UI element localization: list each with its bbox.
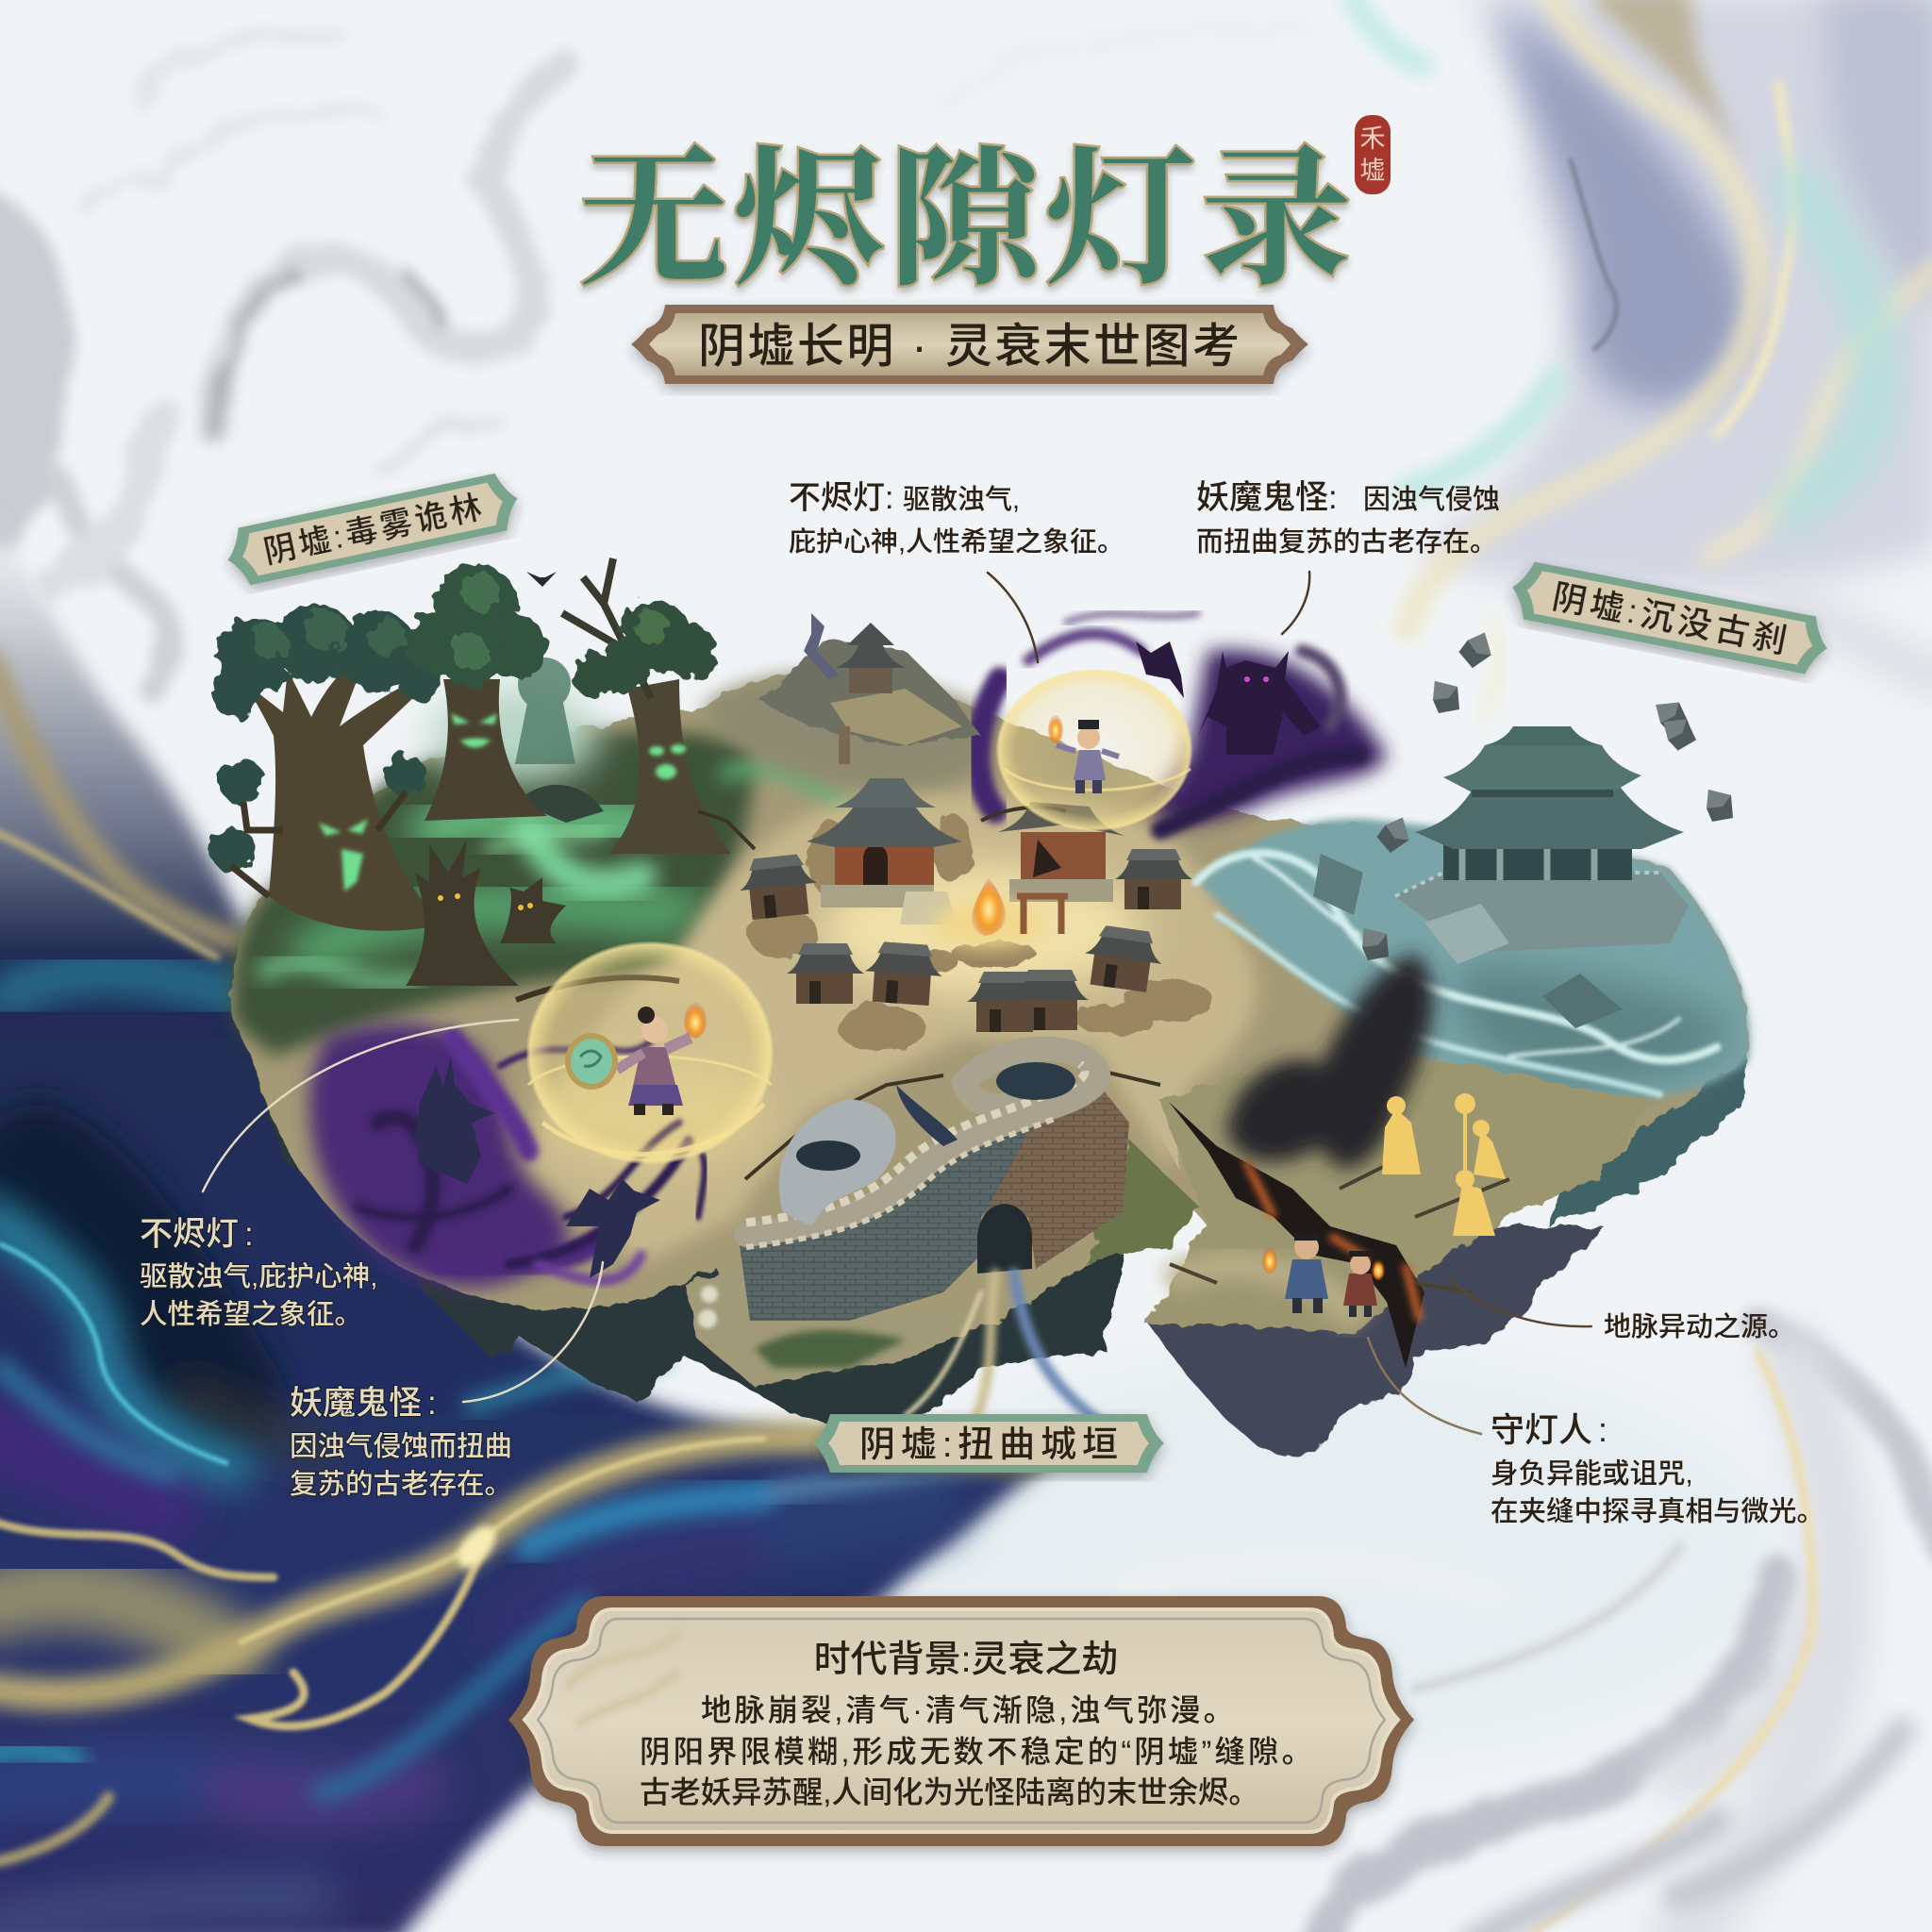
shadow demons xyxy=(415,1057,660,1278)
annotation: lamp lower left: 驱散浊气,庇护心神, xyxy=(140,1261,377,1292)
annotation: lamp keeper: 守灯人: xyxy=(1491,1410,1607,1449)
tan dusk ribbons left xyxy=(0,660,245,943)
lavender mass top right xyxy=(1415,0,1932,594)
campfire xyxy=(932,877,1068,947)
panel: era background xyxy=(508,1596,1414,1846)
left guardian bubble xyxy=(526,941,774,1164)
region: sunken shrine water xyxy=(1196,819,1749,1098)
floating island map xyxy=(209,558,1749,1458)
panel heading: 时代背景:灵衰之劫 xyxy=(814,1640,1118,1680)
sunken shrine xyxy=(1313,726,1689,1028)
purple miasma top xyxy=(978,613,1387,830)
annotation: demons lower left xyxy=(290,1385,512,1500)
panel body xyxy=(640,1693,1312,1809)
stump creatures xyxy=(406,840,566,986)
red seal: 禾 xyxy=(1360,125,1385,153)
annotation: lamp top: 驱散浊气, xyxy=(903,484,1020,515)
rock outcrop with pagoda xyxy=(762,613,981,764)
jade mirror xyxy=(565,1033,618,1090)
annotation: lamp lower left: 不烬灯: xyxy=(140,1216,254,1253)
annotation: lamp lower left xyxy=(140,1216,377,1330)
label: sunken shrine xyxy=(1507,558,1833,677)
annotation: source: 地脉异动之源。 xyxy=(1604,1311,1795,1342)
region: sand ground xyxy=(528,791,1256,1264)
annotation: demons lower left: 因浊气侵蚀而扭曲 xyxy=(290,1431,512,1462)
annotation: demons top: 因浊气侵蚀 xyxy=(1363,484,1500,515)
annotation: demons top: 而扭曲复苏的古老存在。 xyxy=(1196,526,1497,558)
annotation: demons lower left: 复苏的古老存在。 xyxy=(290,1469,512,1500)
annotation: lamp top: 庇护心神,人性希望之象征。 xyxy=(789,526,1124,558)
annotation: demons top xyxy=(1196,479,1500,558)
leader lines xyxy=(203,572,1591,1434)
red seal: 墟 xyxy=(1360,157,1385,185)
annotation: lamp keeper xyxy=(1491,1410,1824,1527)
dark storm lower left xyxy=(0,491,1047,1932)
distant tree xyxy=(515,658,575,764)
flying debris xyxy=(1362,631,1733,960)
second temple xyxy=(998,802,1124,902)
label: twisted wall xyxy=(813,1414,1164,1473)
annotation: lamp top: 不烬灯: xyxy=(789,480,893,516)
wall body xyxy=(739,1099,1099,1321)
region: scorched plain xyxy=(1145,1063,1654,1335)
region: poison forest ground xyxy=(232,689,849,1057)
annotation: lamp lower left: 人性希望之象征。 xyxy=(140,1299,362,1330)
annotation: demons top: 妖魔鬼怪: xyxy=(1196,479,1338,516)
grey sweeps lower right xyxy=(1316,1574,1775,1932)
teal aurora xyxy=(0,1217,236,1467)
mist trees: poison forest xyxy=(209,558,731,986)
purple miasma left xyxy=(309,1024,705,1288)
fall of light beneath arch xyxy=(906,1274,1104,1443)
tree three with face xyxy=(562,558,731,854)
fractures xyxy=(516,808,1160,1179)
moss base xyxy=(684,1269,981,1387)
label: sunken shrine: 阴墟:沉没古刹 xyxy=(1549,576,1790,660)
panel body: 古老妖异苏醒,人间化为光怪陆离的末世余烬。 xyxy=(640,1775,1259,1809)
black smoke xyxy=(1226,953,1433,1168)
wall walkway xyxy=(746,1049,1098,1235)
pale fog behind trees xyxy=(429,689,599,783)
burning village xyxy=(737,778,1213,1053)
chasm fissure xyxy=(1169,1102,1509,1368)
annotation: demons lower left: 妖魔鬼怪: xyxy=(290,1385,437,1422)
subtitle banner: 阴墟长明 · 灵衰末世图考 xyxy=(698,320,1240,373)
region: grey plateau xyxy=(703,674,1000,790)
island surface base xyxy=(231,671,1749,1358)
panel body: 阴阳界限模糊,形成无数不稳定的“阴墟”缝隙。 xyxy=(640,1735,1312,1769)
annotation: lamp top xyxy=(789,480,1124,558)
tree two with face xyxy=(407,564,547,821)
rubble heaps xyxy=(749,815,1213,1053)
cliffs under the island xyxy=(247,1047,1748,1458)
label: poison forest xyxy=(222,470,524,589)
golden spirits xyxy=(1382,1093,1506,1236)
twisted great wall xyxy=(684,1049,1200,1387)
grey ink swirls upper left xyxy=(0,28,1302,689)
demons above xyxy=(1136,641,1321,755)
lamp bearer xyxy=(617,1003,707,1115)
temple guardian bubble xyxy=(996,669,1192,831)
label: twisted wall: 阴墟:扭曲城垣 xyxy=(859,1425,1118,1465)
main temple xyxy=(807,778,962,924)
gold aurora xyxy=(0,1592,226,1651)
twisted stone ribbon xyxy=(779,1099,896,1226)
annotation: lamp keeper: 在夹缝中探寻真相与微光。 xyxy=(1491,1496,1824,1527)
title: 无烬隙灯录 xyxy=(577,137,1357,305)
huts xyxy=(737,853,820,921)
lantern keepers xyxy=(1262,1233,1385,1317)
crow xyxy=(526,572,557,587)
red seal xyxy=(1355,115,1391,194)
tree one with face xyxy=(209,604,453,931)
cool center haze xyxy=(849,1349,1792,1764)
annotation: lamp keeper: 身负异能或诅咒, xyxy=(1491,1458,1693,1490)
subtitle banner xyxy=(631,305,1308,384)
panel body: 地脉崩裂,清气·清气渐隐,浊气弥漫。 xyxy=(701,1693,1234,1727)
label: poison forest: 阴墟:毒雾诡林 xyxy=(260,490,485,571)
figure with lamp xyxy=(1048,715,1119,793)
